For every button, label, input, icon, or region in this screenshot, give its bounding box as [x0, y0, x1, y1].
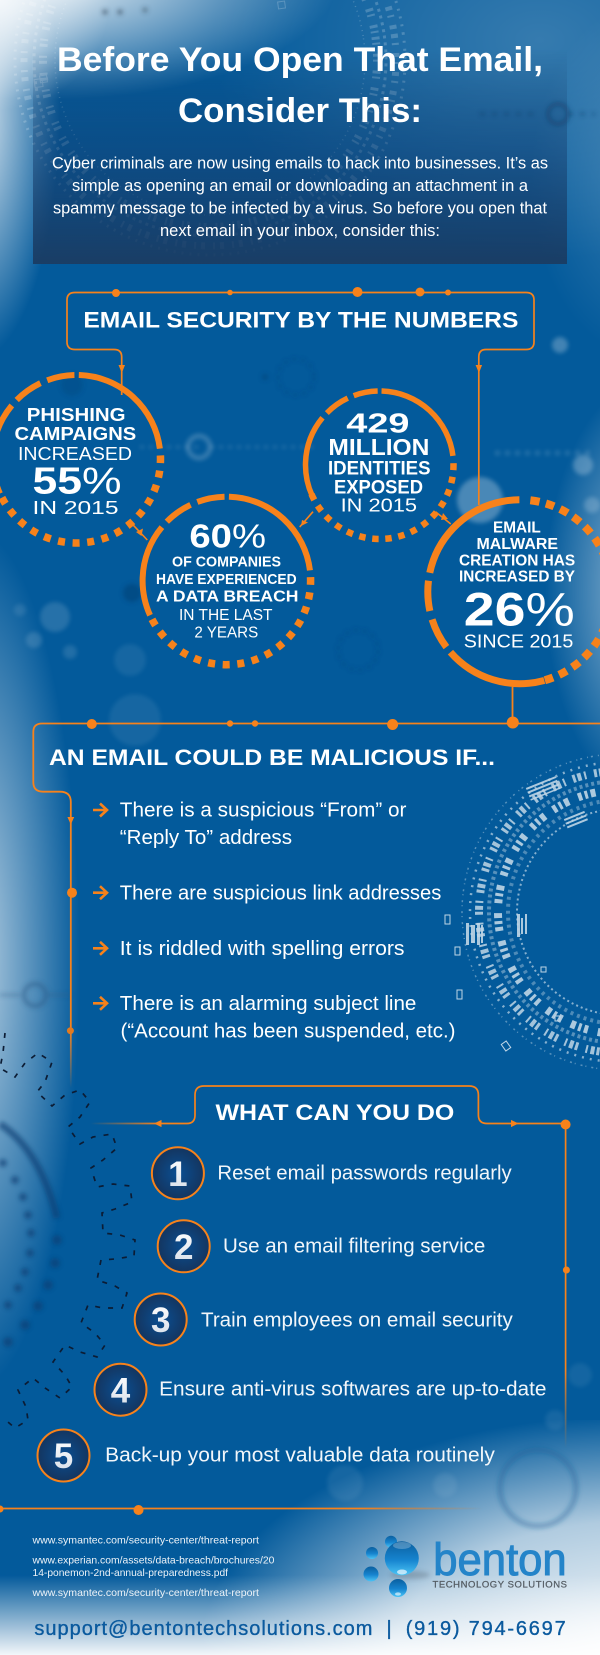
intro text	[52, 154, 548, 240]
step 3: 3	[151, 1301, 170, 1340]
stat circle: phishing: PHISHING	[27, 404, 125, 425]
stat circle: data breach: IN THE LAST	[179, 607, 273, 624]
step 2	[158, 1220, 485, 1272]
source links: www.symantec.com/security-center/threat-report	[31, 1587, 259, 1599]
section frame: what can you do	[90, 1086, 571, 1448]
item: from address	[93, 800, 407, 849]
source links: www.symantec.com/security-center/threat-report	[31, 1534, 259, 1546]
stat circle: email malware: EMAIL	[493, 520, 541, 537]
item: from address: There is a suspicious “From” or	[120, 800, 407, 822]
stat circle: data breach: HAVE EXPERIENCED	[156, 572, 297, 588]
panel: intro background	[33, 50, 567, 264]
stat circle: phishing: INCREASED	[18, 443, 132, 464]
stat circle: data breach	[140, 494, 313, 668]
intro text: Cyber criminals are now using emails to hack into businesses. It’s as	[52, 154, 548, 172]
step 5: Back-up your most valuable data routinely	[105, 1445, 495, 1467]
decorative tech ring right	[445, 754, 600, 1070]
step 3	[135, 1294, 513, 1346]
step 2: 2	[174, 1228, 193, 1267]
source links: 14-ponemon-2nd-annual-preparedness.pdf	[32, 1567, 228, 1579]
step 5	[38, 1430, 495, 1482]
step 4: 4	[111, 1372, 131, 1410]
section frame: email security by the numbers	[67, 287, 534, 505]
item: subject line: (“Account has been suspended, etc.)	[120, 1020, 456, 1042]
step 3: Train employees on email security	[201, 1310, 513, 1332]
heading: email security: EMAIL SECURITY BY THE NUMBERS	[83, 307, 518, 332]
stat circle: identities exposed: MILLION	[328, 434, 429, 460]
stat circle: data breach: A DATA BREACH	[156, 589, 298, 606]
stat circle: phishing: CAMPAIGNS	[14, 423, 136, 444]
dashed squiggle line	[0, 1033, 135, 1428]
icon: water droplets	[364, 1536, 430, 1597]
source links: www.experian.com/assets/data-breach/brochures/20	[32, 1554, 275, 1566]
footer divider line	[0, 1505, 482, 1515]
title: Before You Open That Email,	[57, 41, 543, 79]
intro text: simple as opening an email or downloading an attachment in a	[72, 176, 529, 195]
logo: benton technology solutions: TECHNOLOGY SOLUTIONS	[432, 1580, 567, 1591]
stat circle: email malware: INCREASED BY	[459, 569, 576, 586]
stat circle: identities exposed: 429	[346, 408, 410, 439]
item: subject line: There is an alarming subject line	[120, 993, 416, 1015]
title: Consider This:	[178, 92, 422, 130]
section frame: malicious	[33, 687, 600, 1088]
item: subject line	[93, 993, 456, 1042]
source links	[31, 1534, 275, 1599]
list: malicious signs	[93, 800, 456, 1042]
stat circle: data breach: OF COMPANIES	[172, 555, 281, 571]
stat circle: email malware: MALWARE	[476, 536, 558, 553]
step 5: 5	[54, 1437, 73, 1476]
stat circle: email malware: SINCE 2015	[464, 631, 573, 651]
step 1: 1	[168, 1155, 188, 1194]
step 2: Use an email filtering service	[223, 1236, 485, 1258]
contact line: (919) 794-6697	[406, 1618, 566, 1640]
item: link addresses: There are suspicious link addresses	[120, 882, 441, 904]
logo: benton technology solutions	[364, 1534, 567, 1597]
step 1: Reset email passwords regularly	[217, 1162, 512, 1184]
stat circle: identities exposed: IN 2015	[341, 496, 417, 516]
stat circle: phishing: IN 2015	[32, 497, 118, 518]
logo: benton technology solutions: benton	[433, 1534, 567, 1585]
heading: malicious: AN EMAIL COULD BE MALICIOUS IF...	[49, 745, 495, 770]
intro text: next email in your inbox, consider this:	[160, 221, 440, 240]
contact line: support@bentontechsolutions.com	[34, 1618, 372, 1640]
stat circle: phishing	[0, 372, 163, 546]
stat circle: identities exposed: EXPOSED	[334, 476, 423, 498]
title	[57, 41, 543, 130]
stat circle: email malware: 26%	[464, 583, 575, 636]
contact line: |	[386, 1618, 392, 1640]
step 4	[94, 1364, 546, 1416]
step 1	[152, 1147, 512, 1199]
blurred dotted arcs left	[0, 1124, 62, 1347]
stat circle: email malware: CREATION HAS	[459, 553, 575, 570]
item: from address: “Reply To” address	[120, 827, 292, 849]
stat circle: email malware	[407, 479, 600, 704]
stat circle: data breach: 60%	[189, 518, 266, 555]
item: spelling errors: It is riddled with spelling errors	[120, 938, 405, 960]
stat circle: phishing: 55%	[32, 460, 122, 502]
connector arrows between circles	[130, 512, 451, 540]
heading: what can you do: WHAT CAN YOU DO	[216, 1100, 454, 1125]
contact line	[34, 1618, 566, 1640]
stat circle: identities exposed	[303, 388, 456, 542]
intro text: spammy message to be infected by a virus. So before you open that	[53, 198, 547, 218]
decorative tech ring top left	[0, 0, 430, 280]
stat circle: data breach: 2 YEARS	[194, 624, 258, 641]
step 4: Ensure anti-virus softwares are up-to-date	[159, 1379, 546, 1401]
stat circle: identities exposed: IDENTITIES	[328, 457, 430, 479]
